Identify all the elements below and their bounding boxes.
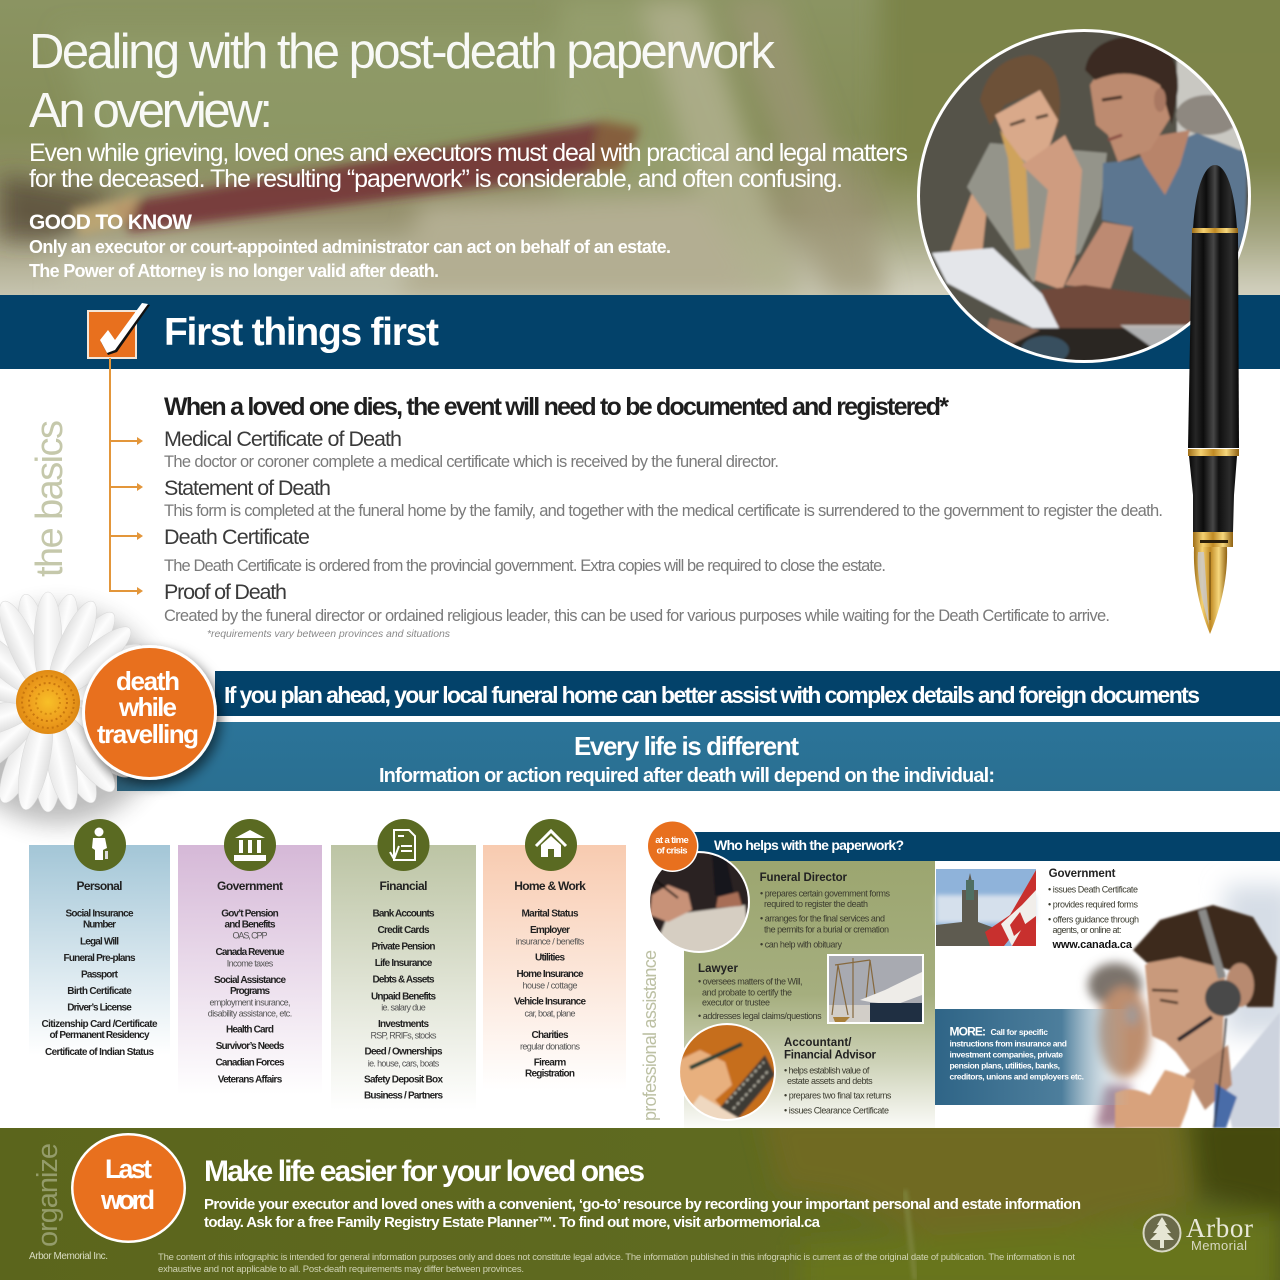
panel: financial: Financial [380,879,428,893]
panel: personal: Social Insurance [66,908,134,920]
panel: more: pension plans, utilities, banks, [950,1060,1060,1070]
logo: arbor memorial [1144,1213,1253,1253]
panel: government: Social Assistance [214,975,286,986]
item: statement of death: Statement of Death [164,476,331,500]
block: funeral director: • arranges for the final services and [760,914,885,924]
item: statement of death: This form is completed at the funeral home by the family, and together with the medical certificate is surrendered to the government to register the death. [164,502,1163,520]
panel: personal: Legal Will [80,936,119,948]
badge: last word: word [100,1185,155,1215]
logo: arbor memorial: Memorial [1191,1238,1247,1253]
panel: government: and Benefits [224,920,276,930]
section: the basics text: When a loved one dies, the event will need to be documented and registered* [164,393,949,421]
block: accountant: Accountant/ [784,1037,852,1049]
panel: home and work: insurance / benefits [516,936,585,946]
photo: calculator and hand [678,1023,777,1122]
block: government: Government [1049,868,1116,880]
panel: home and work: Charities [532,1030,569,1041]
block: accountant [784,1037,892,1116]
panel: more: MORE: [950,1024,986,1038]
panel: personal: Driver’s License [67,1002,132,1014]
header background photo [0,0,1280,295]
panel: home and work: house / cottage [522,980,578,990]
badge: last word [71,1133,186,1243]
last word text: Provide your executor and loved ones with a convenient, ‘go-to’ resource by recording your important personal and estate information [204,1196,1081,1213]
panel: government: disability assistance, etc. [208,1008,292,1018]
block: funeral director: the permits for a burial or cremation [764,924,889,934]
panel: financial: RSP, RRIFs, stocks [370,1030,437,1040]
callout: death while travelling [82,645,217,780]
band: every life is different [117,722,1280,791]
block: accountant: • prepares two final tax returns [784,1090,892,1100]
panel: government [178,819,322,1095]
panel: personal [29,819,170,1058]
block: government: agents, or online at: [1052,925,1122,935]
connector with arrows [110,358,143,595]
panel: government: Veterans Affairs [218,1074,283,1086]
badge: at a time of crisis: of crisis [656,846,688,856]
icon: checkbox [88,303,150,358]
panel: financial: Investments [378,1019,429,1030]
panel: government: Government [217,879,283,893]
illustration: daisy [0,591,166,824]
section: the basics text: *requirements vary between provinces and situations [207,628,451,640]
section: the basics text [164,393,1163,640]
item: death certificate [164,525,886,575]
block: accountant: Financial Advisor [784,1050,877,1062]
panel: financial: ie. salary due [381,1002,426,1012]
disclaimer: The content of this infographic is intended for general information purposes only and does not constitute legal advice. The information published in this infographic is current as of the original date of publication. The information is not [158,1252,1075,1263]
panel: home and work: car, boat, plane [524,1008,576,1018]
last word text [204,1155,1081,1231]
panel: home and work: Home & Work [514,879,586,893]
panel: home and work: Vehicle Insurance [514,996,586,1008]
text: every life is different [379,731,995,787]
panel: financial: Bank Accounts [372,908,435,920]
panel: more: instructions from insurance and [950,1038,1067,1048]
panel: financial: Business / Partners [364,1090,443,1102]
sidebar label: professional assistance: professional assistance [640,950,660,1121]
block: government [1048,868,1139,951]
photo: customer service agent [1088,885,1280,1128]
panel: more: Call for specific [990,1027,1048,1037]
good to know [29,211,671,281]
block: lawyer: executor or trustee [702,998,770,1008]
panel: government: employment insurance, [210,998,290,1008]
panel: home and work: regular donations [520,1042,580,1052]
callout: death while travelling: death [116,666,180,696]
panel: personal: Passport [81,970,119,980]
band: plan ahead [215,671,1280,716]
panel: financial: Unpaid Benefits [371,992,436,1002]
good to know: Only an executor or court-appointed administrator can act on behalf of an estate. [29,237,671,257]
block: accountant: • issues Clearance Certificate [784,1106,889,1116]
badge: at a time of crisis: at a time [655,835,689,846]
last word text: today. Ask for a free Family Registry Estate Planner™. To find out more, visit arbormemorial.ca [204,1214,821,1231]
block: lawyer: • oversees matters of the Will, [698,976,802,986]
last word text: Make life easier for your loved ones [204,1155,645,1188]
photo: funeral director signing [648,851,750,955]
callout: death while travelling: while [118,692,177,722]
panel: home and work: Marital Status [522,908,579,920]
block: government: • issues Death Certificate [1048,884,1138,894]
block: government: • provides required forms [1048,900,1138,910]
block: funeral director [760,872,890,950]
title [29,25,776,138]
item: proof of death [164,580,1110,625]
block: funeral director: Funeral Director [760,872,848,884]
panel: more [935,1009,1130,1105]
block: lawyer: • addresses legal claims/questions [698,1011,822,1021]
panel: olive background for professionals [684,861,935,1128]
panel: financial: Credit Cards [378,925,430,936]
sidebar label: organize: organize [32,1143,64,1247]
panel: home and work: Firearm [534,1058,566,1068]
panel: financial: Life Insurance [375,958,433,969]
heading: first things first: First things first [164,311,439,354]
band: who helps [690,832,1280,861]
text: every life is different: Every life is different [574,731,799,761]
panel: home and work: Employer [530,925,570,936]
panel: financial: Debts & Assets [372,974,435,986]
heading: who helps: Who helps with the paperwork? [714,837,904,853]
intro text: Even while grieving, loved ones and executors must deal with practical and legal matters [29,139,908,167]
panel: more: investment companies, private [950,1050,1063,1060]
panel: home and work: Home Insurance [516,969,584,980]
block: lawyer [698,963,822,1021]
title: An overview: [29,84,273,138]
photo: couple reading paperwork [917,29,1251,368]
panel: government: OAS, CPP [232,930,268,940]
panel: financial: ie. house, cars, boats [368,1058,440,1068]
panel: financial [331,819,476,1110]
item: proof of death: Created by the funeral director or ordained religious leader, this can be used for various purposes while waiting for the Death Certificate to arrive. [164,607,1110,625]
credit: arbor memorial inc: Arbor Memorial Inc. [29,1251,108,1262]
illustration: fountain pen [1188,165,1239,634]
item: medical certificate [164,427,779,471]
disclaimer: exhaustive and not applicable to all. Post-death requirements may differ between provinces. [158,1264,524,1275]
block: government: • offers guidance through [1048,914,1139,924]
panel: personal: Personal [76,879,122,893]
sidebar label: the basics: the basics [29,420,71,577]
item: death certificate: Death Certificate [164,525,310,549]
panel: more: creditors, unions and employers etc. [950,1072,1084,1082]
intro text: for the deceased. The resulting “paperwork” is considerable, and often confusing. [29,165,843,193]
panel: government: Gov’t Pension [221,908,279,920]
title: Dealing with the post-death paperwork [29,25,776,79]
panel: government: Programs [230,986,270,997]
panel: personal: Funeral Pre-plans [64,953,136,964]
block: funeral director: • prepares certain government forms [760,888,890,898]
photo: scales and books [827,954,924,1024]
icon: person [74,819,126,871]
good to know: GOOD TO KNOW [29,211,192,234]
block: lawyer: Lawyer [698,963,739,975]
item: proof of death: Proof of Death [164,580,287,604]
panel: government: Health Card [226,1024,274,1036]
block: accountant: estate assets and debts [787,1076,873,1086]
panel: personal: Certificate of Indian Status [45,1047,154,1058]
block: funeral director: • can help with obituary [760,940,842,950]
panel: government: Survivor’s Needs [216,1041,285,1052]
panel: government: Canadian Forces [216,1058,285,1068]
icon: document with check [378,819,430,871]
badge: at a time of crisis [646,820,698,872]
panel: government: Canada Revenue [216,947,285,958]
photo: parliament and flag [936,869,1036,946]
item: medical certificate: The doctor or coroner complete a medical certificate which is received by the funeral director. [164,453,779,471]
panel: personal: Birth Certificate [67,986,132,997]
item: medical certificate: Medical Certificate of Death [164,427,402,451]
panel: government: Income taxes [227,958,274,968]
panel: financial: Private Pension [372,942,436,952]
icon: government building [224,819,276,871]
panel: personal: of Permanent Residency [50,1030,150,1041]
panel: home and work [483,819,626,1090]
item: death certificate: The Death Certificate is ordered from the provincial government. Extra copies will be required to close the estate. [164,557,886,575]
intro text [29,139,908,193]
disclaimer [158,1252,1075,1275]
band: first things first [0,295,1280,369]
band: last word background [0,1128,1280,1280]
block: accountant: • helps establish value of [784,1066,870,1076]
block: government: www.canada.ca [1052,939,1133,951]
text: plan ahead: If you plan ahead, your local funeral home can better assist with complex details and foreign documents [224,682,1200,708]
text: every life is different: Information or action required after death will depend on the individual: [379,765,995,787]
block: funeral director: required to register the death [764,899,868,909]
panel: financial: Deed / Ownerships [364,1046,443,1058]
panel: personal: Number [83,920,116,930]
callout: death while travelling: travelling [97,719,199,749]
block: lawyer: and probate to certify the [702,988,792,998]
badge: last word: Last [105,1154,152,1184]
item: statement of death [164,476,1163,520]
panel: home and work: Registration [525,1068,575,1080]
icon: house [525,819,577,871]
logo: arbor memorial: Arbor [1186,1213,1253,1243]
panel: financial: Safety Deposit Box [364,1074,443,1086]
panel: home and work: Utilities [535,952,565,964]
good to know: The Power of Attorney is no longer valid after death. [29,261,439,281]
panel: personal: Citizenship Card /Certificate [42,1019,158,1030]
